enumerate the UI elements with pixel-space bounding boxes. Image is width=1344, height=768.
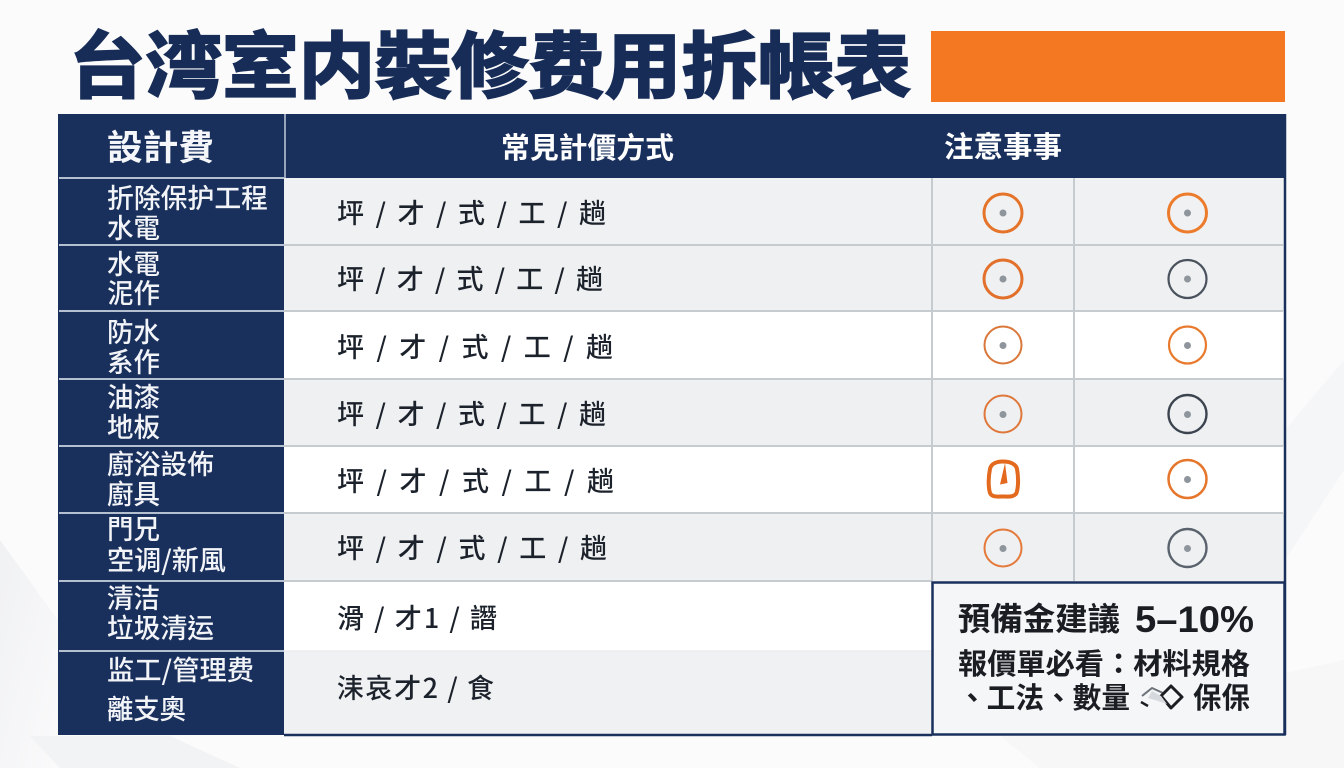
icon row 4 right [1168, 395, 1206, 433]
billing row 1: 坪 / 才 / 式 / 工 / 趟 [337, 192, 606, 231]
category: plumbing: 泥作 [107, 272, 160, 311]
table [58, 114, 1285, 735]
header band [58, 114, 1285, 178]
column header: notes: 注意事事 [944, 124, 1062, 166]
category: demolition [107, 177, 268, 246]
category: paint: 油漆 [107, 376, 160, 415]
callout headline [958, 594, 1254, 640]
billing row 7: 滑 / 才1 / 譖 [337, 597, 497, 636]
right and bottom table edge [284, 114, 1285, 735]
status icons [984, 194, 1206, 567]
callout checklist line 2: 保保 [1193, 675, 1250, 717]
icon row 2 left [984, 260, 1022, 298]
category: cleaning [107, 577, 214, 646]
icon row 6 right [1168, 529, 1206, 567]
icon row 3 left [984, 326, 1022, 364]
icon row 5 right [1168, 460, 1206, 498]
icon row 3 right [1169, 326, 1206, 364]
category: cleaning: 垃圾清运 [107, 607, 214, 646]
icon row 4 left [984, 396, 1022, 432]
category: waterproofing [107, 311, 160, 380]
billing row 3: 坪 / 才 / 式 / 工 / 趟 [337, 326, 613, 365]
category: demolition: 水電 [107, 207, 160, 246]
icon row 5 left: dial [989, 462, 1018, 497]
orange title accent bar [931, 31, 1285, 102]
table row backgrounds [284, 178, 1285, 735]
category: doors and air conditioning: 門兄 [107, 508, 160, 547]
category: plumbing [107, 243, 160, 311]
callout headline: 預備金建議 [958, 594, 1120, 640]
category: kitchen and bath: 廚具 [107, 473, 160, 512]
category: plumbing: 水電 [107, 243, 160, 282]
callout checklist line 2 [958, 675, 1250, 717]
left category column [58, 114, 285, 735]
category: demolition: 折除保护工程 [107, 177, 268, 216]
callout checklist line 1: 報價單必看：材料規格 [958, 641, 1250, 683]
icon row 1 left [984, 194, 1022, 232]
column header: design fee: 設計費 [107, 120, 214, 171]
billing row 4: 坪 / 才 / 式 / 工 / 趟 [337, 393, 606, 432]
icon row 1 right [1168, 194, 1206, 232]
billing row 2: 坪 / 才 / 式 / 工 / 趟 [337, 258, 603, 297]
callout checklist line 2: 、工法、數量 [958, 675, 1130, 717]
billing row 5: 坪 / 才 / 式 / 工 / 趟 [337, 460, 614, 499]
icon row 6 left [984, 530, 1022, 566]
column header: common billing: 常見計價方式 [501, 125, 674, 167]
category: kitchen and bath [107, 443, 214, 512]
callout headline: 5–10% [1135, 599, 1254, 640]
category: cleaning: 清洁 [107, 577, 160, 616]
billing method values [337, 192, 614, 706]
category: supervision: 離支奧 [107, 688, 186, 727]
billing row 8: 洡哀才2 / 食 [337, 667, 494, 706]
category: supervision: 监工/管理费 [107, 649, 254, 688]
category: waterproofing: 系作 [107, 341, 160, 380]
category: doors and air conditioning: 空调/新風 [107, 539, 226, 578]
category: kitchen and bath: 廚浴設佈 [107, 443, 214, 482]
category: supervision [107, 649, 254, 727]
title: 台湾室内裝修费用拆帳表 [69, 8, 911, 113]
icon row 2 right [1168, 260, 1206, 298]
category: paint [107, 376, 160, 445]
billing row 6: 坪 / 才 / 式 / 工 / 趟 [337, 527, 607, 566]
icon: handshake diamonds [1141, 686, 1182, 708]
category: paint: 地板 [107, 406, 160, 445]
callout: reserve and quotation advice [932, 582, 1284, 734]
category: doors and air conditioning [107, 508, 226, 578]
category: waterproofing: 防水 [107, 311, 160, 350]
